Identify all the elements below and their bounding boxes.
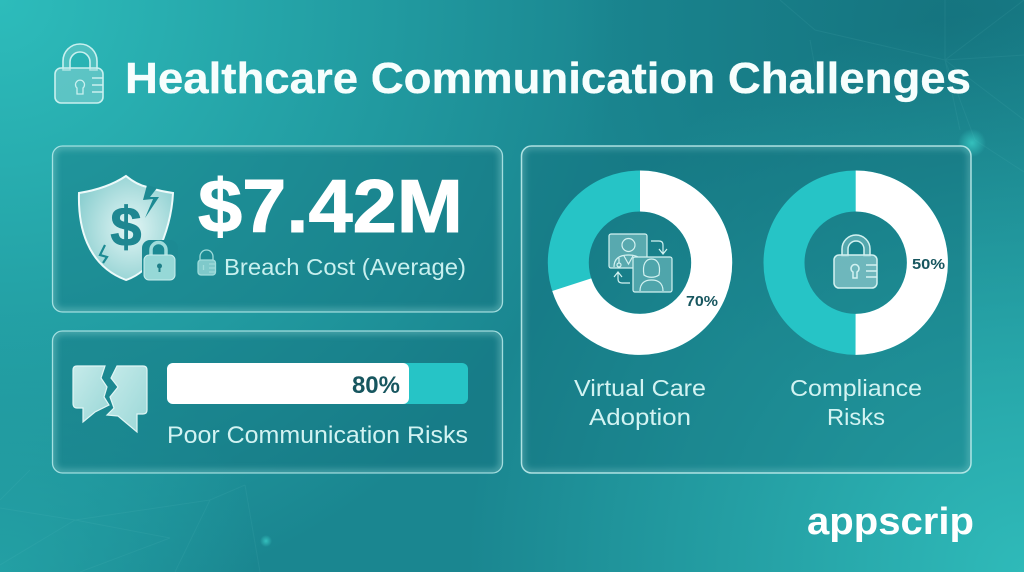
title lock icon bbox=[55, 44, 103, 103]
value: $7.42M bbox=[198, 164, 463, 248]
label: virtual care adoption: Virtual Care bbox=[574, 375, 706, 401]
icon: padlock bbox=[834, 235, 877, 288]
icon: small lock bbox=[198, 250, 216, 275]
panel: breach cost bbox=[52, 146, 502, 312]
donut chart: virtual care adoption: 70% bbox=[686, 293, 718, 310]
icon: broken speech bubbles bbox=[73, 366, 147, 432]
label: compliance risks: Compliance bbox=[790, 375, 922, 401]
label: Poor Communication Risks bbox=[167, 422, 468, 449]
icon: broken shield with dollar sign and lock: $ bbox=[110, 195, 142, 258]
donut chart: virtual care adoption bbox=[568, 191, 718, 334]
label: virtual care adoption: Adoption bbox=[589, 404, 691, 430]
title: Healthcare Communication Challenges bbox=[125, 54, 971, 103]
panel: poor communication risks bbox=[52, 331, 502, 473]
panel: adoption and compliance bbox=[522, 146, 971, 473]
donut chart: compliance risks: 50% bbox=[912, 256, 945, 273]
label: compliance risks: Risks bbox=[827, 404, 885, 430]
progress bar: 80% bbox=[352, 372, 400, 399]
progress bar bbox=[167, 363, 468, 404]
icon: broken shield with dollar sign and lock bbox=[79, 176, 178, 282]
donut chart: compliance risks bbox=[784, 191, 945, 334]
icon: doctor and patient video call bbox=[609, 234, 672, 292]
label: Breach Cost (Average) bbox=[224, 254, 466, 280]
logo: appscrip: appscrip bbox=[807, 501, 974, 543]
